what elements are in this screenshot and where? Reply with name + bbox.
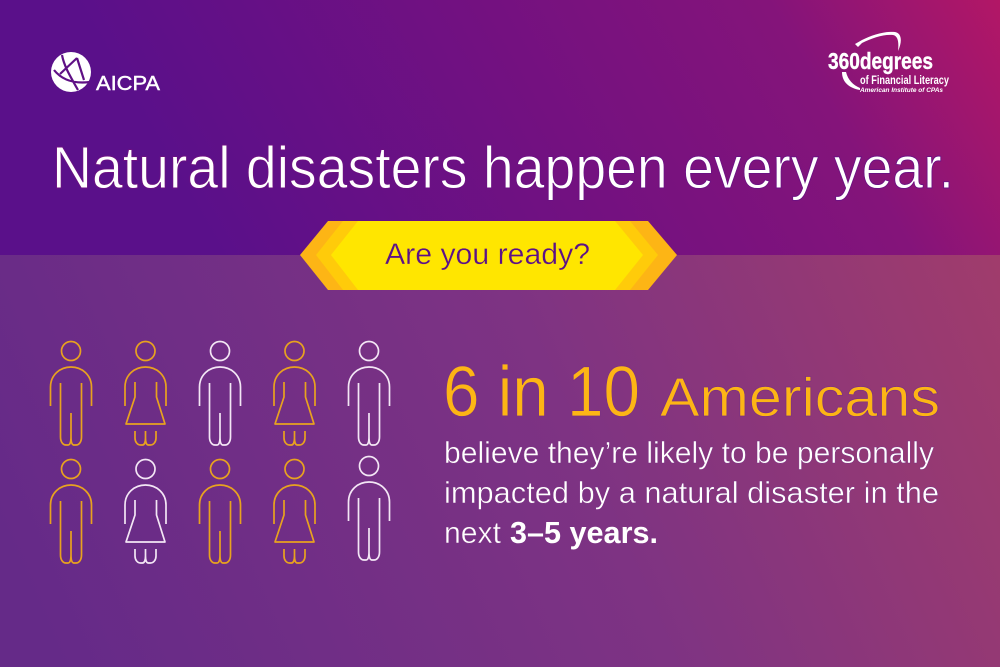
person: man, orange [200,460,240,563]
person: woman, orange [125,342,166,445]
text block: statistic description [444,435,939,550]
person: woman, orange [274,342,315,445]
pictogram: 10 people, 6 highlighted [50,342,390,563]
logo: 360 degrees of Financial Literacy [828,32,949,94]
wordmark: American Institute of CPAs: American Institute of CPAs [859,87,943,94]
wordmark: of Financial Literacy: of Financial Literacy [860,75,949,87]
line 3: next [444,515,501,550]
icon: orbit arrow [855,32,901,51]
statistic: 6 in 10 Americans [443,353,940,432]
statistic noun: Americans [660,366,940,428]
person: man, white [200,342,240,445]
banner text: Are you ready? [385,238,590,271]
logo: AICPA [51,52,161,95]
person: man, white [348,342,390,445]
person: man, white [348,456,390,560]
line 3 emphasis: 3–5 years. [510,515,658,550]
icon: AICPA globe [51,52,91,92]
title: Natural disasters happen every year. [52,135,954,201]
person: woman, orange [274,460,315,563]
icon: orbit tail [842,72,860,90]
line 1: believe they’re likely to be personally [444,435,934,470]
wordmark: 360degrees: 360degrees [828,48,933,74]
background: lower panel [0,255,1000,667]
statistic number: 6 in 10 [443,353,640,432]
person: man, orange [50,342,92,445]
person: man, orange [50,460,92,563]
line 2: impacted by a natural disaster in the [444,475,939,510]
wordmark: AICPA: AICPA [96,73,161,95]
background: top band [0,0,1000,256]
banner: Are you ready? [300,221,677,290]
person: woman, white [125,460,166,563]
